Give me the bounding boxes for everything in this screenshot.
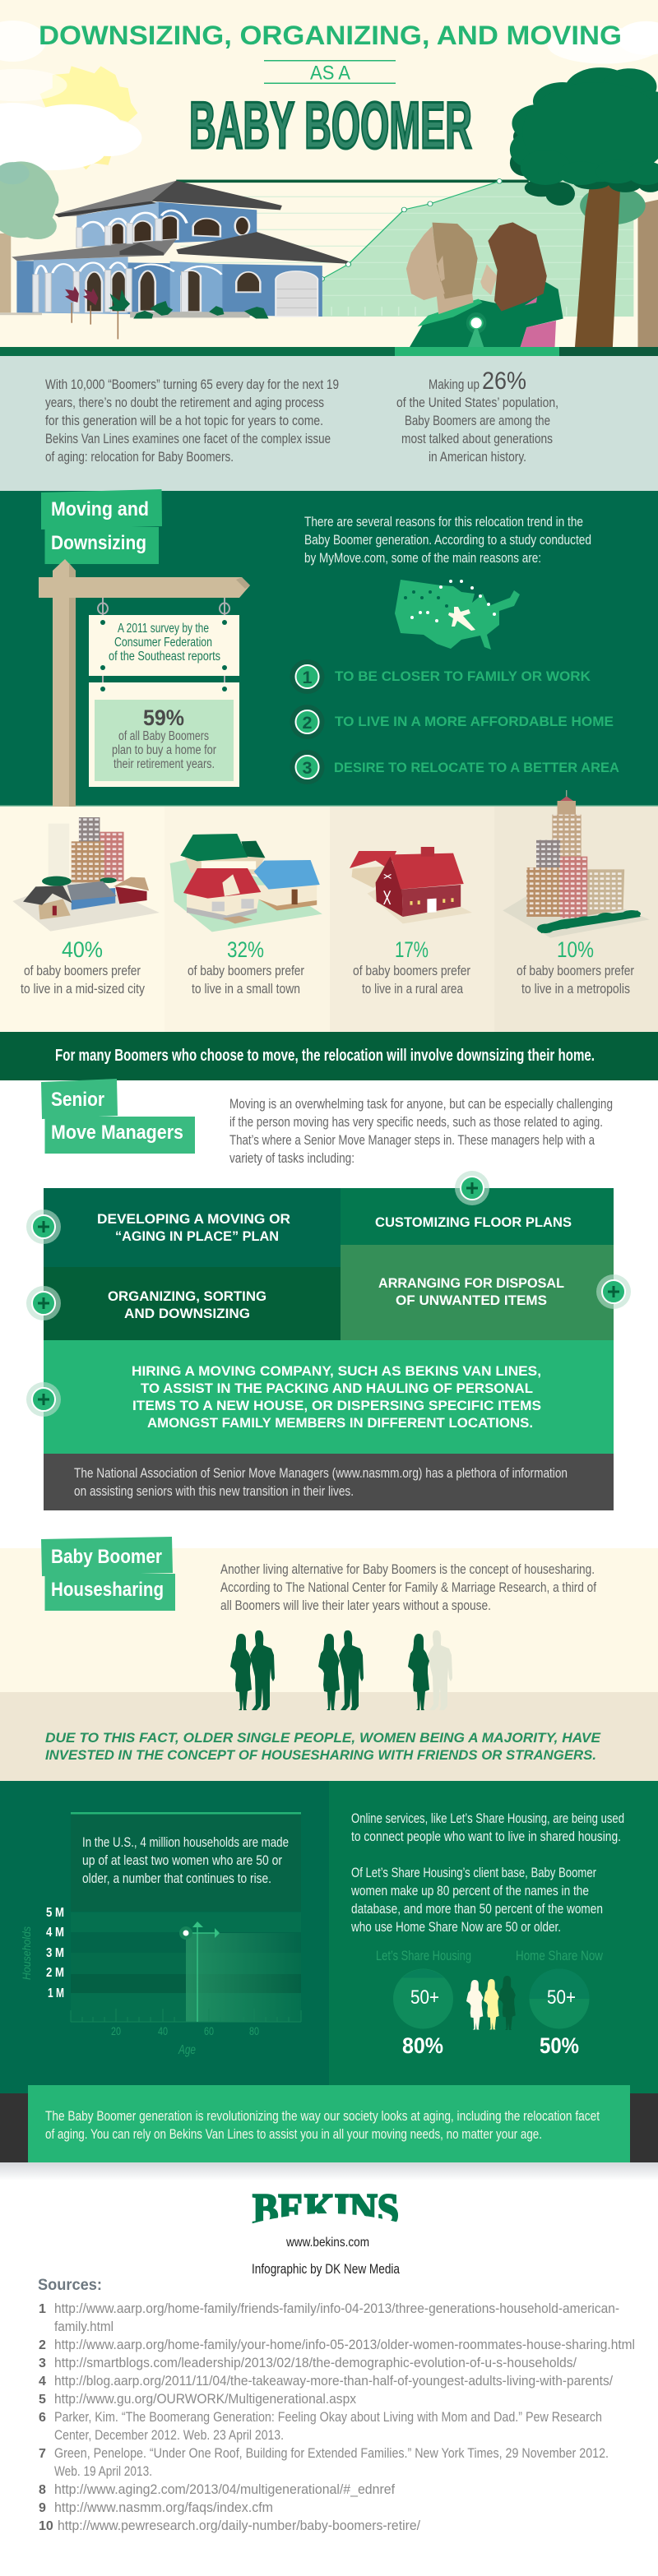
intro right text with 26% <box>396 368 558 465</box>
chart: households by age: Households <box>20 1926 33 1980</box>
chart: households by age <box>20 1906 301 2057</box>
stat: 17 percent <box>353 937 470 997</box>
intro left text: With 10,000 “Boomers” turning 65 every day for the next 19 <box>45 377 339 392</box>
icon: metropolis <box>503 790 650 938</box>
housesharing statement <box>45 1730 601 1763</box>
task: floor plans: CUSTOMIZING FLOOR PLANS <box>375 1214 572 1230</box>
stat: home share now 50 percent: 50% <box>540 2033 579 2058</box>
sign: survey <box>89 615 239 676</box>
sources list: http://www.aarp.org/home-family/friends-family/info-04-2013/three-generations-household-american- <box>54 2301 619 2316</box>
reason 2 <box>290 705 614 739</box>
sources list: Center, December 2012. Web. 23 April 2013. <box>54 2427 284 2443</box>
sources list: 4 <box>39 2375 46 2389</box>
intro left text <box>45 377 339 465</box>
sign: 59 percent: their retirement years. <box>114 757 215 771</box>
conclusion band: of aging. You can rely on Bekins Van Lines to assist you in all your moving needs, no matter your age. <box>45 2126 542 2142</box>
sources list: http://www.aging2.com/2013/04/multigenerational/#_ednref <box>54 2481 395 2497</box>
sources list: 9 <box>39 2501 46 2515</box>
icon: couple silhouettes <box>230 1630 452 1710</box>
task: hiring a moving company <box>44 1340 614 1454</box>
plus badges <box>26 1171 631 1417</box>
banner: downsizing statement <box>0 1032 658 1080</box>
stat: 17 percent: 17% <box>395 937 429 962</box>
stat: lets share housing 80 percent <box>376 1948 471 2058</box>
sign: 59 percent: plan to buy a home for <box>112 743 216 757</box>
heading: baby boomer housesharing: Housesharing <box>51 1579 164 1601</box>
sources list: http://www.nasmm.org/faqs/index.cfm <box>54 2500 273 2515</box>
sun lower rays <box>63 151 111 169</box>
sign: 59 percent <box>89 682 239 787</box>
heading: moving and downsizing: Moving and <box>51 498 149 520</box>
task: organizing: ORGANIZING, SORTING <box>108 1288 266 1304</box>
panel: intro <box>0 356 658 491</box>
households callout: up of at least two women who are 50 or <box>82 1852 282 1868</box>
households callout: older, a number that continues to rise. <box>82 1871 271 1886</box>
chart: households by age: Age <box>178 2043 196 2057</box>
sources list: 2 <box>39 2338 46 2352</box>
stat: 32 percent: to live in a small town <box>192 981 300 997</box>
task: hiring a moving company: ITEMS TO A NEW HOUSE, OR DISPERSING SPECIFIC ITEMS <box>132 1398 541 1413</box>
task: moving plan: “AGING IN PLACE” PLAN <box>115 1228 279 1244</box>
sources list: 6 <box>39 2411 46 2425</box>
sign: 59 percent: 59% <box>143 705 184 730</box>
stat: lets share housing 80 percent: Let’s Share Housing <box>376 1948 471 1963</box>
senior move manager description <box>229 1096 613 1166</box>
task: hiring a moving company: AMONGST FAMILY MEMBERS IN DIFFERENT LOCATIONS. <box>147 1415 533 1431</box>
y axis labels: 1 M <box>48 1986 64 2000</box>
garage door <box>276 271 317 317</box>
task: disposal: ARRANGING FOR DISPOSAL <box>378 1275 564 1291</box>
clouds <box>0 21 658 170</box>
mid foliage <box>580 187 646 224</box>
hero illustration <box>0 21 658 347</box>
house <box>0 181 348 339</box>
sources list: 5 <box>39 2393 46 2407</box>
stat: 17 percent: of baby boomers prefer <box>353 963 470 978</box>
stat: 40 percent: of baby boomers prefer <box>24 963 141 978</box>
reason 2: 2 <box>303 714 313 733</box>
stat: 40 percent: 40% <box>62 937 103 962</box>
stat: 40 percent: to live in a mid-sized city <box>21 981 145 997</box>
x axis labels: 80 <box>249 2024 259 2037</box>
stat: home share now 50 percent: 50+ <box>547 1986 576 2009</box>
footer shadow <box>0 2162 658 2181</box>
stat: 32 percent: 32% <box>227 937 264 962</box>
stat: 32 percent <box>188 937 304 997</box>
task: organizing <box>44 1267 341 1340</box>
sources list: http://www.pewresearch.org/daily-number/baby-boomers-retire/ <box>58 2518 420 2533</box>
intro right text with 26%: 26% <box>482 368 526 395</box>
panel: where boomers prefer to live <box>0 790 658 1032</box>
hero background <box>0 0 658 356</box>
y axis labels <box>46 1906 64 2000</box>
sources list: 7 <box>39 2447 46 2461</box>
task: hiring a moving company: HIRING A MOVING COMPANY, SUCH AS BEKINS VAN LINES, <box>132 1363 541 1379</box>
reasons intro text: There are several reasons for this relocation trend in the <box>304 514 583 530</box>
sources list: 1 <box>39 2302 46 2316</box>
online services text <box>350 1811 624 1935</box>
task: moving plan: DEVELOPING A MOVING OR <box>97 1211 290 1227</box>
intro left text: for this generation will be a hot topic for years to come. <box>45 413 323 428</box>
panel: housesharing <box>0 1537 658 1781</box>
sign chains <box>98 598 229 689</box>
reasons intro text: Baby Boomer generation. According to a study conducted <box>304 532 591 548</box>
panel: moving and downsizing <box>0 489 658 807</box>
heading: senior move managers: Senior <box>51 1089 104 1111</box>
stat: home share now 50 percent: Home Share Now <box>516 1948 604 1963</box>
reason 3: DESIRE TO RELOCATE TO A BETTER AREA <box>334 760 619 775</box>
heading: moving and downsizing <box>41 489 162 564</box>
intro right text with 26%: of the United States’ population, <box>396 395 558 410</box>
heading: moving and downsizing: Downsizing <box>51 532 146 554</box>
sources list: http://smartblogs.com/leadership/2013/02/18/the-demographic-evolution-of-u-s-households/ <box>54 2355 577 2370</box>
heading: baby boomer housesharing: Baby Boomer <box>51 1546 162 1568</box>
housesharing statement: INVESTED IN THE CONCEPT OF HOUSESHARING WITH FRIENDS OR STRANGERS. <box>45 1747 596 1763</box>
main trunk <box>575 179 620 347</box>
tree crown <box>510 67 658 206</box>
housesharing statement: DUE TO THIS FACT, OLDER SINGLE PEOPLE, WOMEN BEING A MAJORITY, HAVE <box>45 1730 601 1746</box>
sign: 59 percent: of all Baby Boomers <box>118 729 209 743</box>
online services text: database, and more than 50 percent of the women <box>351 1901 603 1917</box>
signpost <box>39 559 250 807</box>
intro right text with 26%: Baby Boomers are among the <box>405 413 550 428</box>
icon: rural barn <box>350 847 472 923</box>
stat: 40 percent <box>21 937 145 997</box>
task: disposal: OF UNWANTED ITEMS <box>396 1293 547 1308</box>
stat: 17 percent: to live in a rural area <box>362 981 463 997</box>
intro left text: of aging: relocation for Baby Boomers. <box>45 449 234 465</box>
reason 3: 3 <box>303 759 313 778</box>
chart area behind house <box>322 181 633 317</box>
panel: senior move managers <box>0 1079 658 1548</box>
sources heading: Sources: <box>38 2277 102 2294</box>
reason 1 <box>290 659 591 694</box>
intro right text with 26%: in American history. <box>429 449 526 465</box>
logo: bekins: BEKINS <box>253 2185 399 2234</box>
sources list: Web. 19 April 2013. <box>54 2463 152 2479</box>
plants <box>65 286 98 305</box>
subtitle: as a: AS A <box>310 62 350 84</box>
title: DOWNSIZING, ORGANIZING, AND MOVING <box>39 21 622 50</box>
icon: three women <box>466 1976 516 2030</box>
website: www.bekins.com <box>285 2236 369 2250</box>
intro right text with 26%: most talked about generations <box>401 431 553 446</box>
sources list: family.html <box>54 2319 114 2334</box>
conclusion band <box>0 2085 658 2162</box>
sources list: 8 <box>39 2483 46 2497</box>
task: floor plans <box>341 1188 614 1245</box>
intro right text with 26%: Making up <box>429 377 480 392</box>
stat: 10 percent: 10% <box>557 937 594 962</box>
x axis labels <box>111 2024 259 2037</box>
stat: lets share housing 80 percent: 80% <box>402 2033 443 2058</box>
task: moving plan <box>44 1188 341 1267</box>
panel: housesharing statistics <box>0 1781 658 2093</box>
intro left text: Bekins Van Lines examines one facet of the complex issue <box>45 431 331 446</box>
task: disposal <box>341 1245 614 1340</box>
sign: survey: of the Southeast reports <box>109 650 220 664</box>
y axis labels: 5 M <box>46 1906 64 1920</box>
couple <box>406 222 563 347</box>
online services text: who use Home Share Now are 50 or older. <box>350 1919 561 1935</box>
stat: 32 percent: of baby boomers prefer <box>188 963 304 978</box>
heading: senior move managers: Move Managers <box>51 1122 183 1144</box>
heading: senior move managers <box>41 1079 195 1154</box>
sign: survey: A 2011 survey by the <box>118 622 209 636</box>
heading: baby boomer housesharing <box>41 1537 175 1611</box>
sources list: 3 <box>39 2356 46 2370</box>
x axis labels: 20 <box>111 2024 121 2037</box>
intro left text: years, there’s no doubt the retirement and aging process <box>45 395 324 410</box>
reason 2: TO LIVE IN A MORE AFFORDABLE HOME <box>335 714 614 729</box>
sources list: http://www.gu.org/OURWORK/Multigenerational.aspx <box>54 2391 356 2407</box>
senior move manager description: variety of tasks including: <box>229 1150 354 1166</box>
reasons intro text: by MyMove.com, some of the main reasons are: <box>304 550 541 566</box>
online services text: women make up 80 percent of the names in the <box>350 1883 589 1898</box>
y axis labels: 4 M <box>46 1926 64 1940</box>
housesharing description <box>220 1561 596 1613</box>
y axis labels: 3 M <box>46 1946 64 1960</box>
task: hiring a moving company: TO ASSIST IN THE PACKING AND HAULING OF PERSONAL <box>141 1380 533 1396</box>
y axis labels: 2 M <box>46 1966 64 1980</box>
sources list <box>39 2301 635 2533</box>
icon: us map with plane <box>395 580 520 650</box>
housesharing description: all Boomers will live their later years without a spouse. <box>220 1598 491 1613</box>
stat: 10 percent: to live in a metropolis <box>521 981 630 997</box>
sources list: 10 <box>39 2519 53 2533</box>
task: organizing: AND DOWNSIZING <box>124 1306 250 1321</box>
reason 1: TO BE CLOSER TO FAMILY OR WORK <box>335 668 591 684</box>
credit: Infographic by DK New Media <box>252 2261 400 2277</box>
icon: small town <box>170 834 322 932</box>
sun <box>39 66 137 122</box>
reason 3 <box>290 750 619 784</box>
sources list: http://blog.aarp.org/2011/11/04/the-takeaway-more-than-half-of-youngest-adults-living-with-parents/ <box>54 2373 613 2389</box>
callout: nasmm: on assisting seniors with this new transition in their lives. <box>74 1483 354 1499</box>
icon: mid-sized city <box>12 817 160 932</box>
x axis labels: 40 <box>158 2024 168 2037</box>
stat: 10 percent: of baby boomers prefer <box>517 963 634 978</box>
stat: 10 percent <box>517 937 634 997</box>
x axis labels: 60 <box>204 2024 214 2037</box>
left tree <box>0 161 58 312</box>
reasons intro text <box>304 514 591 566</box>
sign: survey: Consumer Federation <box>114 636 212 650</box>
households callout <box>71 1812 301 1912</box>
reason 1: 1 <box>303 668 313 687</box>
hero footer stripe <box>0 347 658 356</box>
far right trunk <box>638 200 658 347</box>
stat: home share now 50 percent <box>516 1948 604 2058</box>
households callout: In the U.S., 4 million households are made <box>82 1834 289 1850</box>
callout: nasmm <box>44 1454 614 1510</box>
stat: lets share housing 80 percent: 50+ <box>410 1986 439 2009</box>
